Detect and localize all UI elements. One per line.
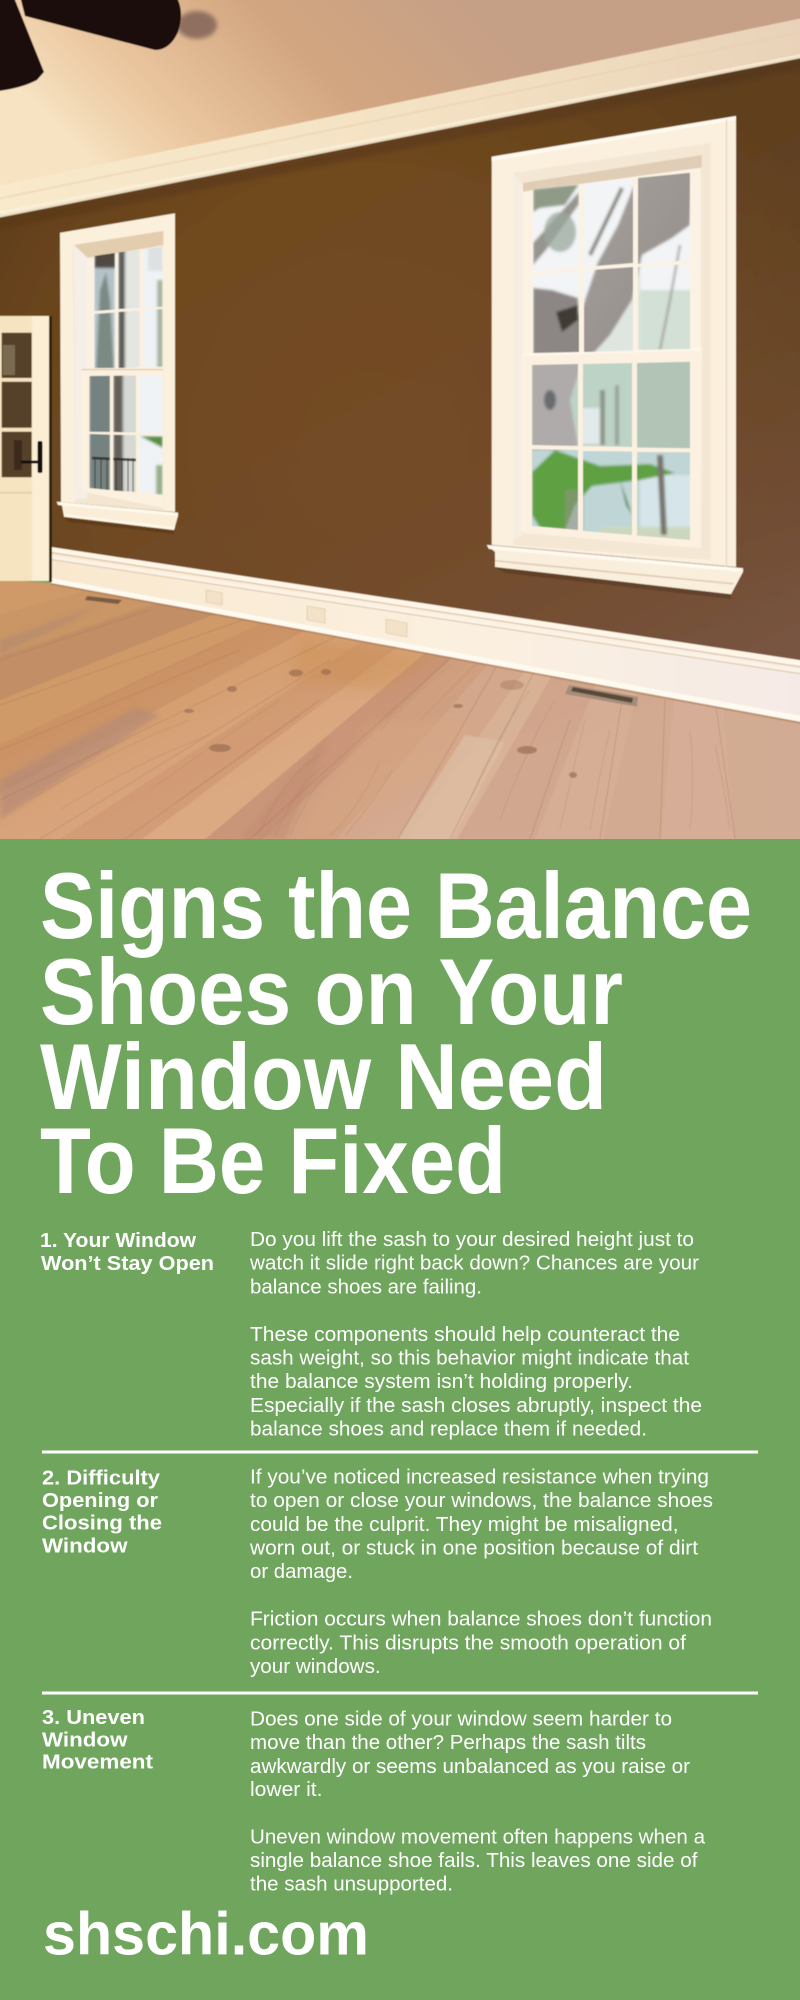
- section 3 body: [250, 1709, 706, 1896]
- divider 1: [42, 1450, 758, 1454]
- section 1 body: balance shoes are failing.: [250, 1276, 482, 1298]
- section 1 body: Especially if the sash closes abruptly, inspect the: [250, 1395, 702, 1417]
- title: To Be Fixed: [40, 1108, 506, 1213]
- left window: [57, 213, 178, 534]
- dark plank patches: [0, 708, 160, 820]
- section 1 body: These components should help counteract the: [250, 1324, 680, 1346]
- baseboard: [51, 547, 800, 726]
- section 2 body: to open or close your windows, the balance shoes: [250, 1490, 713, 1512]
- section 1 body: Do you lift the sash to your desired height just to: [250, 1229, 694, 1251]
- section 3 heading: Window: [42, 1728, 128, 1751]
- section 3 body: lower it.: [250, 1779, 322, 1801]
- section 3 body: the sash unsupported.: [250, 1874, 453, 1896]
- section 2 body: or damage.: [250, 1561, 353, 1583]
- website url: shschi.com: [43, 1900, 369, 1968]
- section 3 body: Does one side of your window seem harder to: [250, 1709, 672, 1731]
- door: [0, 316, 52, 582]
- wall: [0, 56, 800, 666]
- section 2 heading: Window: [42, 1534, 128, 1558]
- section 1 heading: [40, 1229, 214, 1275]
- section 2 heading: 2. Difficulty: [42, 1466, 161, 1489]
- section 3 body: move than the other? Perhaps the sash tilts: [250, 1732, 646, 1754]
- section 3 body: single balance shoe fails. This leaves one side of: [250, 1850, 698, 1872]
- divider 2: [42, 1692, 758, 1694]
- floor: [0, 580, 800, 839]
- sill: [487, 545, 743, 594]
- section 2 body: Friction occurs when balance shoes don’t function: [250, 1609, 712, 1631]
- sill: [57, 502, 178, 530]
- wall outlets: [206, 590, 407, 637]
- section 2 body: [249, 1467, 713, 1678]
- section 2 heading: [42, 1466, 162, 1558]
- section 1 body: the balance system isn’t holding properly.: [250, 1371, 633, 1393]
- section 1 body: watch it slide right back down? Chances are your: [249, 1253, 699, 1275]
- ceiling speaker: [177, 11, 217, 39]
- section 2 body: If you’ve noticed increased resistance when trying: [250, 1467, 709, 1489]
- ceiling fan blades: [0, 0, 181, 92]
- section 3 heading: Movement: [42, 1751, 153, 1774]
- lower sash: [522, 349, 702, 548]
- section 3 heading: 3. Uneven: [42, 1706, 145, 1729]
- crown moulding: [0, 16, 800, 220]
- section 3 heading: [42, 1706, 153, 1774]
- section 2 heading: Opening or: [42, 1489, 158, 1512]
- right window: [487, 116, 743, 599]
- casing: [60, 213, 175, 512]
- plank seams and grain: [0, 600, 735, 839]
- ceiling: [0, 0, 800, 190]
- section 1 heading: Won’t Stay Open: [41, 1252, 214, 1275]
- section 2 body: correctly. This disrupts the smooth operation of: [250, 1632, 686, 1654]
- section 1 heading: 1. Your Window: [40, 1229, 196, 1252]
- section 1 body: balance shoes and replace them if needed.: [250, 1419, 647, 1441]
- upper sash: [523, 168, 701, 356]
- sash frames: [87, 246, 163, 370]
- section 2 body: could be the culprit. They might be misaligned,: [250, 1514, 678, 1536]
- title: [40, 853, 752, 1213]
- glass view: tree and garden: [525, 165, 695, 543]
- section 3 body: Uneven window movement often happens when a: [250, 1827, 706, 1849]
- section 2 body: your windows.: [250, 1656, 381, 1678]
- photo: room with windows and wood floor: [0, 0, 800, 852]
- section 3 body: awkwardly or seems unbalanced as you raise or: [250, 1756, 690, 1778]
- section 1 body: sash weight, so this behavior might indicate that: [250, 1348, 689, 1370]
- section 1 body: [249, 1229, 702, 1441]
- section 2 heading: Closing the: [42, 1511, 162, 1534]
- title: Window Need: [40, 1024, 607, 1129]
- glass view: [88, 246, 164, 496]
- floor vents: [85, 596, 638, 707]
- section 2 body: worn out, or stuck in one position because of dirt: [249, 1538, 698, 1560]
- title: Shoes on Your: [40, 939, 623, 1044]
- casing: [492, 116, 736, 567]
